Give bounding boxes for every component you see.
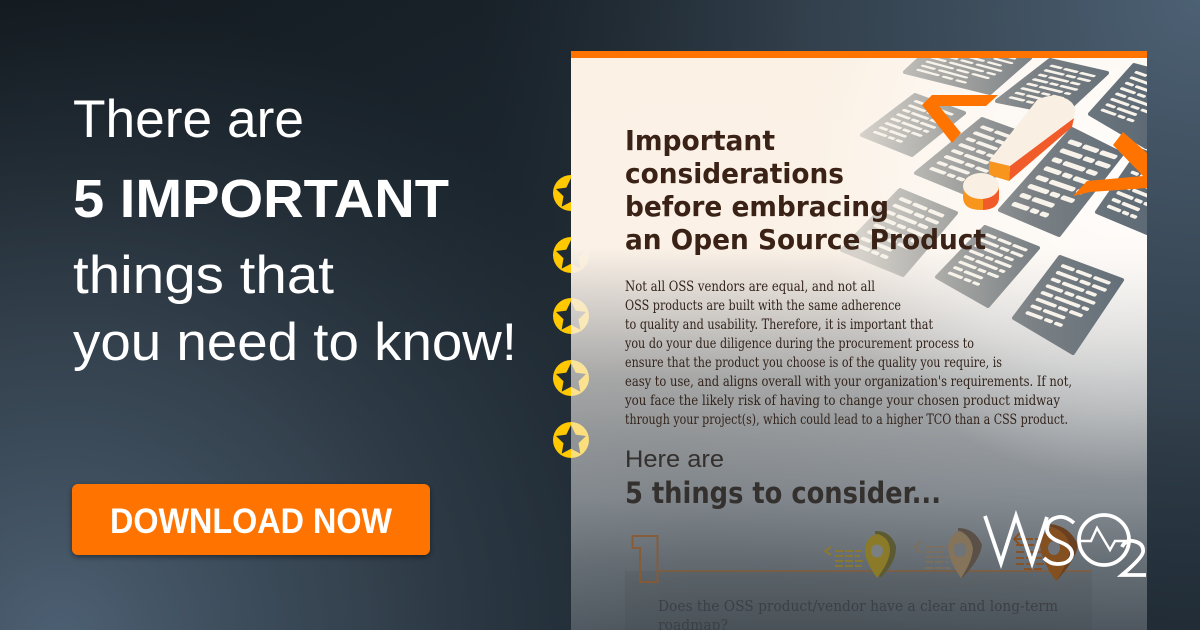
orange top bar (571, 51, 1147, 58)
headline (73, 90, 517, 372)
document intro text: you do your due diligence during the procurement process to (624, 336, 974, 352)
button: download now (72, 484, 430, 555)
document title: an Open Source Product (625, 223, 986, 256)
item 1 box: Does the OSS product/vendor have a clear and long-term (658, 599, 1058, 615)
button: download now: DOWNLOAD NOW (110, 502, 392, 541)
illustration: orange brackets (922, 95, 1147, 196)
item 1 box (625, 536, 1092, 630)
headline: things that (73, 246, 334, 305)
illustration: exclamation mark (963, 96, 1075, 210)
document intro text: OSS products are built with the same adherence (625, 298, 901, 314)
document intro text: to quality and usability. Therefore, it is important that (625, 317, 933, 333)
document intro text: easy to use, and aligns overall with your organization's requirements. If not, (625, 374, 1072, 390)
document intro text: you face the likely risk of having to change your chosen product midway (624, 393, 1060, 409)
section heading: 5 things to consider... (625, 476, 941, 510)
map pin icons (825, 524, 1078, 581)
section heading (625, 446, 941, 510)
document intro text: Not all OSS vendors are equal, and not all (625, 279, 875, 295)
headline: There are (73, 90, 304, 149)
document title: before embracing (625, 190, 889, 223)
headline: you need to know! (73, 313, 517, 372)
illustration: document sheets (840, 58, 1147, 356)
headline: 5 IMPORTANT (73, 169, 449, 229)
WSO2 logo (985, 515, 1146, 575)
document preview panel (571, 35, 1190, 630)
star badges (553, 175, 589, 458)
document title: Important (625, 124, 775, 157)
document intro text: through your project(s), which could lead to a higher TCO than a CSS product. (625, 412, 1068, 428)
document intro text: ensure that the product you choose is of the quality you require, is (625, 355, 1002, 371)
numeral 1 (632, 536, 658, 582)
section heading: Here are (625, 446, 724, 473)
document title: considerations (625, 157, 844, 190)
document intro text (624, 279, 1072, 428)
document title (625, 124, 986, 256)
